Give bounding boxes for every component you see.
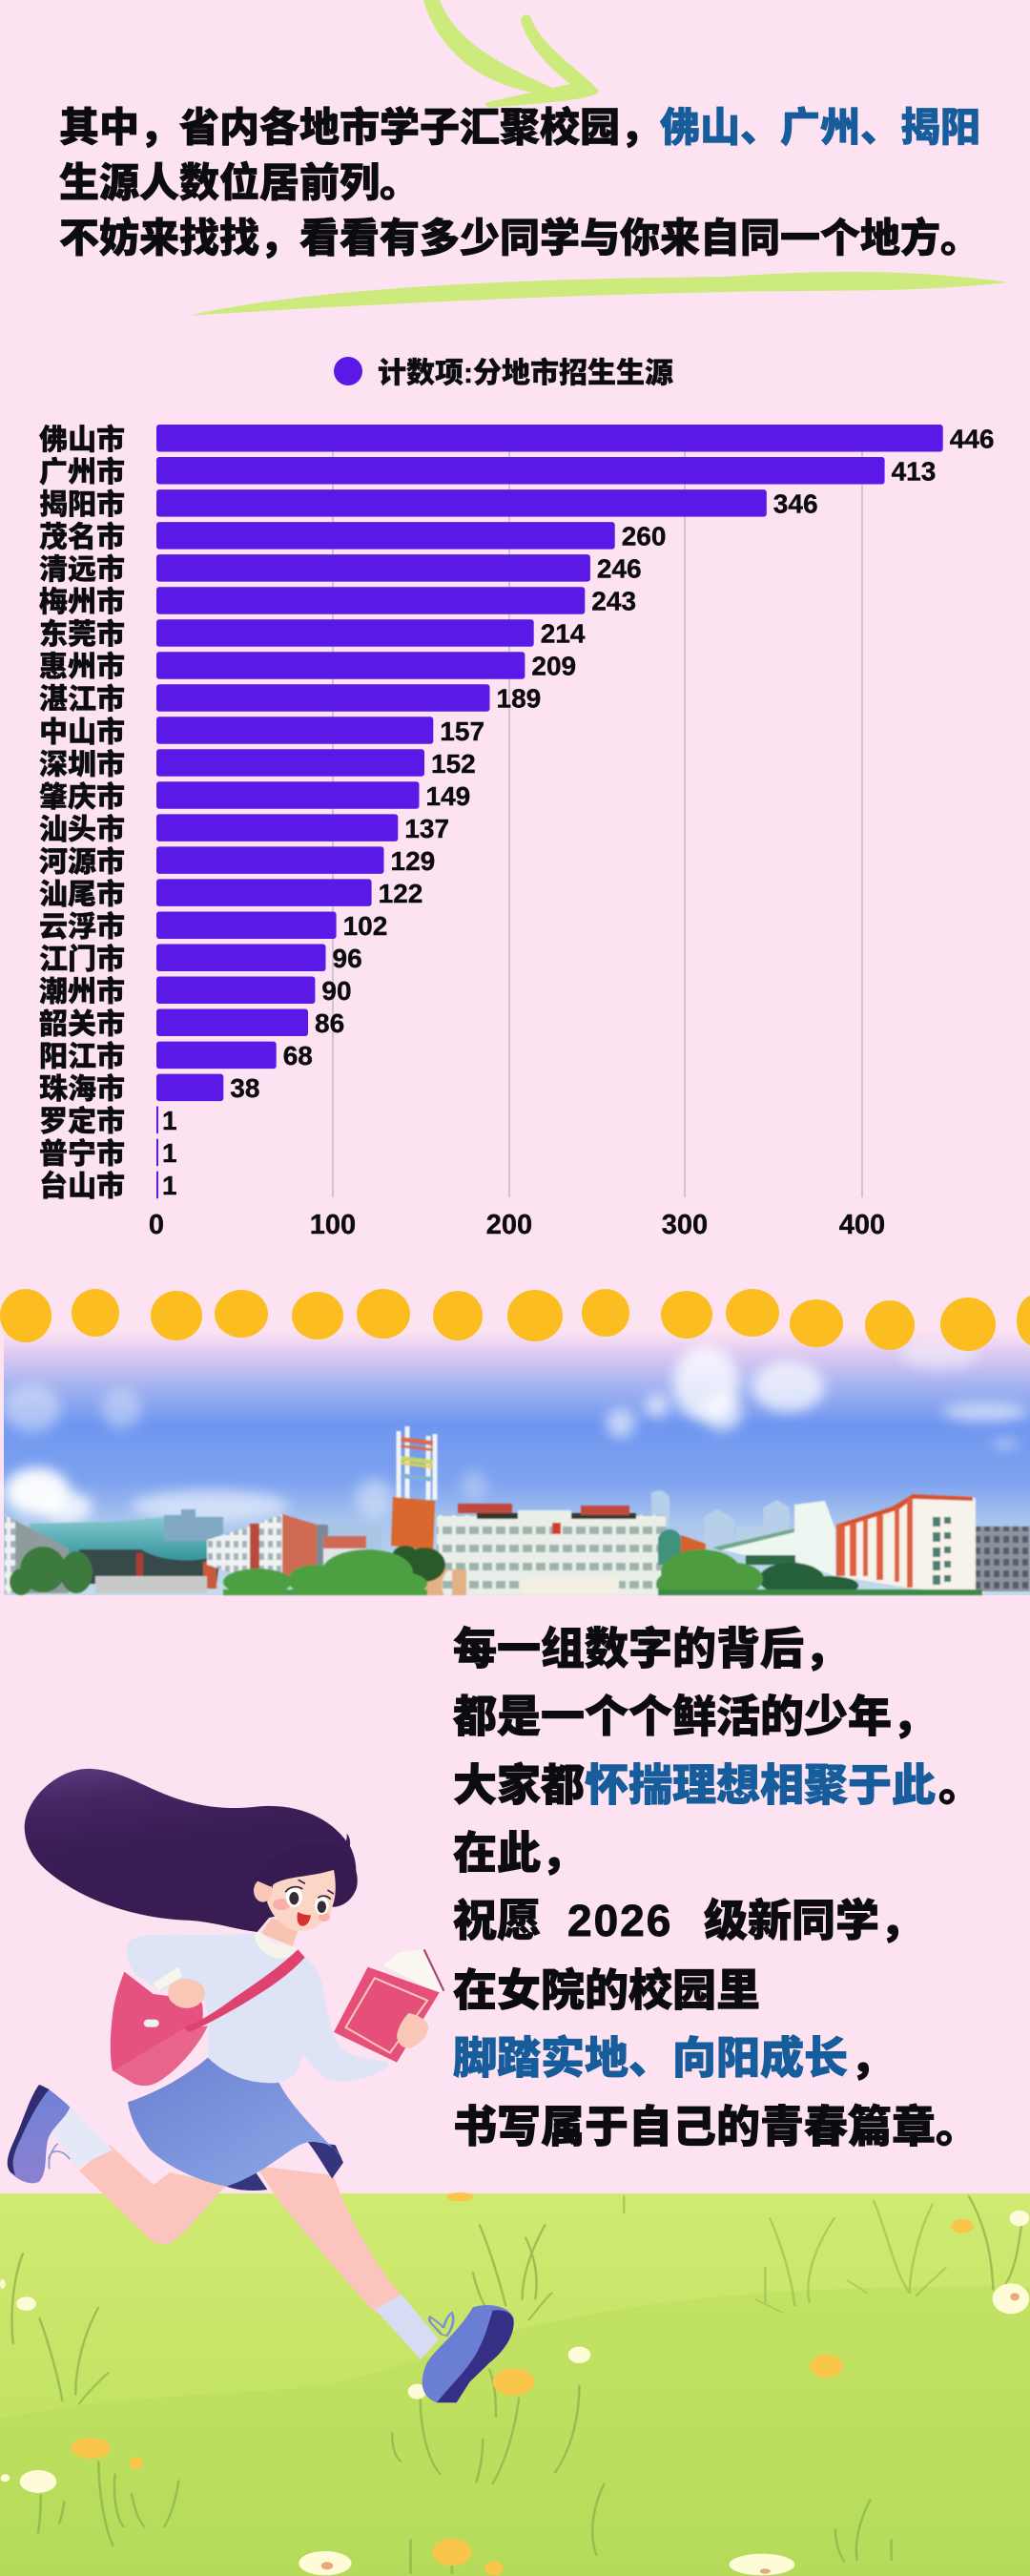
bar: 韶关市 86 — [39, 1008, 344, 1040]
green pavilion — [658, 1529, 681, 1565]
bar: 揭阳市 346: 揭阳市 — [39, 488, 125, 521]
bar: 台山市 1: 台山市 — [39, 1171, 125, 1203]
bar: 河源市 129: 129 — [391, 846, 435, 876]
bar: 阳江市 68 — [39, 1041, 313, 1073]
bar: 湛江市 189: 189 — [496, 684, 541, 714]
chart gridlines — [333, 425, 862, 1197]
bar: 韶关市 86: 韶关市 — [39, 1008, 125, 1040]
x axis labels — [149, 1210, 885, 1240]
red and white building — [836, 1494, 984, 1593]
bar chart: students by city — [39, 357, 994, 1240]
x axis labels: 200 — [486, 1210, 532, 1240]
white building with orange end — [207, 1527, 250, 1579]
sweater — [126, 1934, 388, 2083]
eyes — [285, 1880, 333, 1915]
blush — [273, 1899, 330, 1922]
white and green building — [712, 1501, 835, 1576]
fringe and right lobe — [255, 1843, 358, 1907]
bar: 汕头市 137 — [39, 813, 449, 845]
bar: 云浮市 102: 云浮市 — [39, 910, 125, 943]
trees — [10, 1546, 982, 1595]
bar: 珠海市 38: 38 — [230, 1073, 259, 1103]
main building — [437, 1515, 666, 1595]
bar: 梅州市 243: 梅州市 — [39, 586, 125, 618]
bar: 汕尾市 122 — [39, 878, 422, 910]
intro paragraph: 佛山、广州、揭阳 — [660, 105, 980, 150]
bar: 茂名市 260: 茂名市 — [39, 521, 125, 553]
bar: 罗定市 1 — [39, 1106, 177, 1138]
bar: 普宁市 1 — [39, 1138, 177, 1171]
entrance plinth — [521, 1577, 619, 1594]
bag strap — [184, 1949, 305, 2032]
bar: 佛山市 446: 446 — [950, 424, 994, 454]
bar: 珠海市 38: 珠海市 — [39, 1073, 125, 1106]
intro paragraph: 其中，省内各地市学子汇聚校园， — [59, 105, 660, 150]
upper body in detail — [8, 1769, 443, 2191]
bar: 肇庆市 149: 149 — [425, 781, 470, 811]
bar: 普宁市 1: 普宁市 — [39, 1138, 125, 1171]
bar: 茂名市 260 — [39, 521, 666, 553]
bar: 惠州市 209: 209 — [531, 652, 576, 681]
gate — [425, 1569, 466, 1595]
bag — [111, 1972, 208, 2086]
hair back — [25, 1769, 356, 1932]
bar: 云浮市 102 — [39, 910, 387, 943]
yellow dots row — [0, 1289, 1030, 1351]
bar: 广州市 413: 413 — [892, 456, 936, 487]
collar — [255, 1932, 296, 1959]
closing paragraph: 2026 — [567, 1896, 672, 1945]
head: face, collar, fringe — [254, 1843, 358, 1959]
hazy hills — [30, 1517, 223, 1565]
arrow: green hand-drawn arrow — [423, 0, 599, 108]
dark hall — [79, 1549, 220, 1584]
bar: 肇庆市 149: 肇庆市 — [39, 780, 125, 813]
front shoe and laces — [422, 2305, 514, 2402]
back shoe and sock — [8, 2085, 113, 2183]
green swoosh underline — [189, 272, 1008, 316]
bar: 佛山市 446: 佛山市 — [39, 424, 125, 456]
bar: 清远市 246: 清远市 — [39, 553, 125, 586]
campus buildings — [5, 1426, 1030, 1595]
closing paragraph: 级新同学， — [704, 1896, 923, 1945]
bar: 东莞市 214: 214 — [541, 619, 586, 649]
hand on book — [397, 2013, 428, 2048]
bar: 肇庆市 149 — [39, 780, 470, 813]
bar: 韶关市 86: 86 — [315, 1008, 344, 1038]
bar: 广州市 413: 广州市 — [39, 456, 125, 488]
bar: 中山市 157 — [39, 716, 484, 748]
bar: 揭阳市 346 — [39, 488, 818, 521]
bar: 深圳市 152: 深圳市 — [39, 748, 125, 780]
bar: 汕尾市 122: 122 — [379, 879, 422, 908]
closing paragraph: 。 — [938, 1760, 982, 1810]
bar: 阳江市 68: 68 — [283, 1041, 313, 1070]
bar: 汕头市 137: 汕头市 — [39, 813, 125, 845]
bar: 河源市 129: 河源市 — [39, 845, 125, 878]
bar: 深圳市 152: 152 — [431, 749, 476, 779]
bar: 河源市 129 — [39, 845, 435, 878]
bar: 珠海市 38 — [39, 1073, 259, 1106]
bar: 罗定市 1: 1 — [162, 1106, 177, 1135]
darker hill shading — [0, 2287, 1030, 2576]
bar: 汕头市 137: 137 — [404, 814, 449, 843]
bar: 中山市 157: 中山市 — [39, 716, 125, 748]
bar: 湛江市 189 — [39, 683, 541, 716]
clouds — [3, 1340, 1028, 1524]
x axis labels: 100 — [310, 1210, 356, 1240]
back leg — [79, 2145, 229, 2244]
illustration: running girl reading a book — [8, 1769, 514, 2402]
distant towers — [164, 1509, 223, 1541]
bar: 清远市 246: 246 — [597, 554, 642, 584]
closing paragraph: 在此， — [453, 1828, 585, 1878]
closing paragraph: 都是一个个鲜活的少年， — [453, 1692, 936, 1741]
hair wisp — [340, 1834, 350, 1854]
front leg — [256, 2166, 405, 2314]
intro paragraph: 生源人数位居前列。 — [59, 160, 420, 205]
bar: 东莞市 214 — [39, 618, 586, 651]
bar: 普宁市 1: 1 — [162, 1138, 177, 1168]
closing paragraph: 祝愿 — [453, 1896, 541, 1945]
ear — [254, 1880, 272, 1902]
flowers — [0, 2192, 1029, 2575]
bar: 台山市 1: 1 — [162, 1171, 177, 1200]
plaza — [95, 1576, 207, 1593]
left grey building — [5, 1515, 69, 1593]
closing paragraph: ， — [850, 2033, 894, 2083]
bar: 惠州市 209: 惠州市 — [39, 651, 125, 683]
bar: 东莞市 214: 东莞市 — [39, 618, 125, 651]
x axis labels: 300 — [662, 1210, 708, 1240]
bar: 潮州市 90: 潮州市 — [39, 975, 125, 1008]
bar: 潮州市 90 — [39, 975, 352, 1008]
bar: 深圳市 152 — [39, 748, 476, 780]
bar: 台山市 1 — [39, 1171, 177, 1203]
bar: 湛江市 189: 湛江市 — [39, 683, 125, 716]
bar: 广州市 413 — [39, 456, 936, 488]
bar: 汕尾市 122: 汕尾市 — [39, 878, 125, 910]
mouth — [298, 1912, 311, 1926]
bar: 揭阳市 346: 346 — [773, 489, 818, 519]
grass blades — [11, 2196, 1021, 2573]
chart legend: 计数项:分地市招生生源 — [378, 357, 673, 389]
neck — [260, 1918, 299, 1946]
right grey building — [976, 1527, 1030, 1591]
closing paragraph: 在女院的校园里 — [453, 1965, 760, 2015]
bar: 潮州市 90: 90 — [321, 976, 352, 1006]
bar: 云浮市 102: 102 — [343, 911, 387, 941]
skirt — [128, 2058, 343, 2191]
closing paragraph: 每一组数字的背后， — [453, 1624, 848, 1673]
tower frame — [399, 1426, 435, 1500]
bar: 江门市 96 — [39, 943, 362, 975]
tower base — [391, 1497, 435, 1550]
closing paragraph: 脚踏实地、向阳成长 — [453, 2033, 848, 2083]
sky — [4, 1332, 1030, 1595]
bar: 江门市 96: 96 — [332, 944, 362, 973]
book — [334, 1949, 443, 2063]
hand and cuff — [154, 1967, 205, 2008]
x axis labels: 400 — [839, 1210, 885, 1240]
bar: 阳江市 68: 阳江市 — [39, 1041, 125, 1073]
intro paragraph: 不妨来找找，看看有多少同学与你来自同一个地方。 — [59, 216, 980, 260]
front sock — [375, 2295, 439, 2359]
closing paragraph: 怀揣理想相聚于此 — [585, 1760, 936, 1810]
bar: 佛山市 446 — [39, 424, 994, 456]
closing paragraph: 大家都 — [453, 1760, 585, 1810]
x axis labels: 0 — [149, 1210, 164, 1240]
bar: 茂名市 260: 260 — [622, 522, 666, 551]
bar: 江门市 96: 江门市 — [39, 943, 125, 975]
bar: 中山市 157: 157 — [440, 717, 484, 746]
bar: 惠州市 209 — [39, 651, 576, 683]
closing paragraph: 书写属于自己的青春篇章。 — [453, 2102, 979, 2151]
bar: 罗定市 1: 罗定市 — [39, 1106, 125, 1138]
grass meadow — [0, 2192, 1030, 2576]
bar: 梅州市 243: 243 — [591, 587, 636, 616]
face — [267, 1870, 337, 1931]
bar: 梅州市 243 — [39, 586, 636, 618]
campus panorama banner — [0, 1289, 1030, 1595]
bar: 清远市 246 — [39, 553, 642, 586]
mid building — [317, 1525, 328, 1578]
